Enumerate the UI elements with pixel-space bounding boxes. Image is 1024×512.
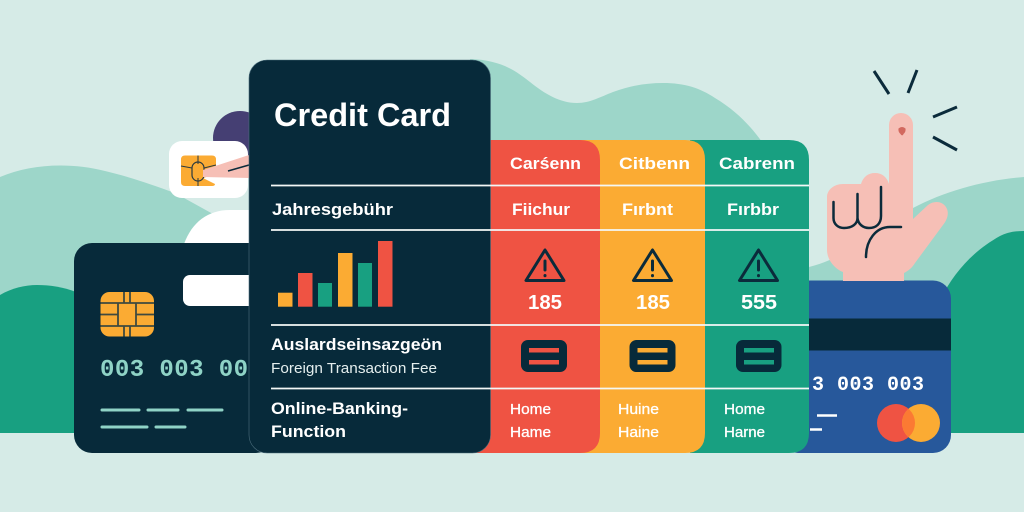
row label: annual fee: Jahresgebühr	[272, 200, 393, 219]
magnetic stripe	[780, 318, 951, 350]
row label: foreign fee: Auslardseinsazgeön	[271, 335, 442, 354]
online banking values: Haine	[618, 425, 659, 441]
icon: finger pointing at chip	[203, 155, 249, 178]
column headers: Cabrenn	[719, 154, 795, 173]
column headers: Carśenn	[510, 154, 581, 173]
icons: card symbols	[521, 340, 782, 372]
person head behind cards	[213, 111, 267, 165]
fingers outline	[834, 187, 901, 257]
online banking values: Hame	[510, 425, 551, 441]
row label continuation: Function	[271, 422, 346, 441]
icon: orange chip	[181, 156, 216, 186]
online banking values	[510, 402, 765, 441]
table row dividers	[271, 186, 809, 388]
chip callout	[169, 141, 249, 198]
fee numbers	[528, 292, 777, 314]
column: orange provider	[580, 140, 705, 453]
icon: card chip	[100, 292, 154, 336]
annual fee values	[512, 200, 779, 219]
annual fee values: Fırbbr	[727, 200, 779, 219]
bar chart	[278, 241, 392, 307]
card number: 003 003 00	[100, 357, 248, 384]
icons: warning triangles	[526, 250, 778, 280]
card lines	[810, 416, 837, 430]
column headers	[510, 154, 795, 173]
finger crease	[228, 165, 249, 171]
online banking values: Home	[724, 402, 765, 418]
hand pointing up	[827, 70, 957, 281]
title: Credit Card	[274, 97, 451, 133]
column headers: Citbenn	[619, 154, 690, 173]
icon: card network circles	[877, 404, 940, 442]
card number: 3 003 003	[812, 374, 924, 397]
fee numbers: 185	[636, 292, 670, 314]
back-left credit card	[74, 243, 274, 453]
fee numbers: 555	[741, 292, 777, 314]
row sublabel: Foreign Transaction Fee	[271, 360, 437, 377]
person body	[184, 210, 255, 244]
annual fee values: Fiichur	[512, 200, 570, 219]
right blue credit card	[780, 280, 951, 453]
online banking values: Home	[510, 402, 551, 418]
annual fee values: Fırbnt	[622, 200, 673, 219]
white signature strip	[183, 275, 263, 306]
background hills	[0, 59, 1024, 433]
online banking values: Huine	[618, 402, 659, 418]
column: red provider	[470, 140, 600, 453]
comparison table columns	[470, 140, 809, 453]
column: green provider	[690, 140, 809, 453]
row label: online banking: Online-Banking-	[271, 399, 408, 418]
fee numbers: 185	[528, 292, 562, 314]
card detail lines	[102, 410, 222, 427]
fingertip mark	[898, 127, 906, 135]
online banking values: Harne	[724, 425, 765, 441]
main dark panel	[249, 60, 490, 453]
emphasis rays	[874, 70, 957, 150]
